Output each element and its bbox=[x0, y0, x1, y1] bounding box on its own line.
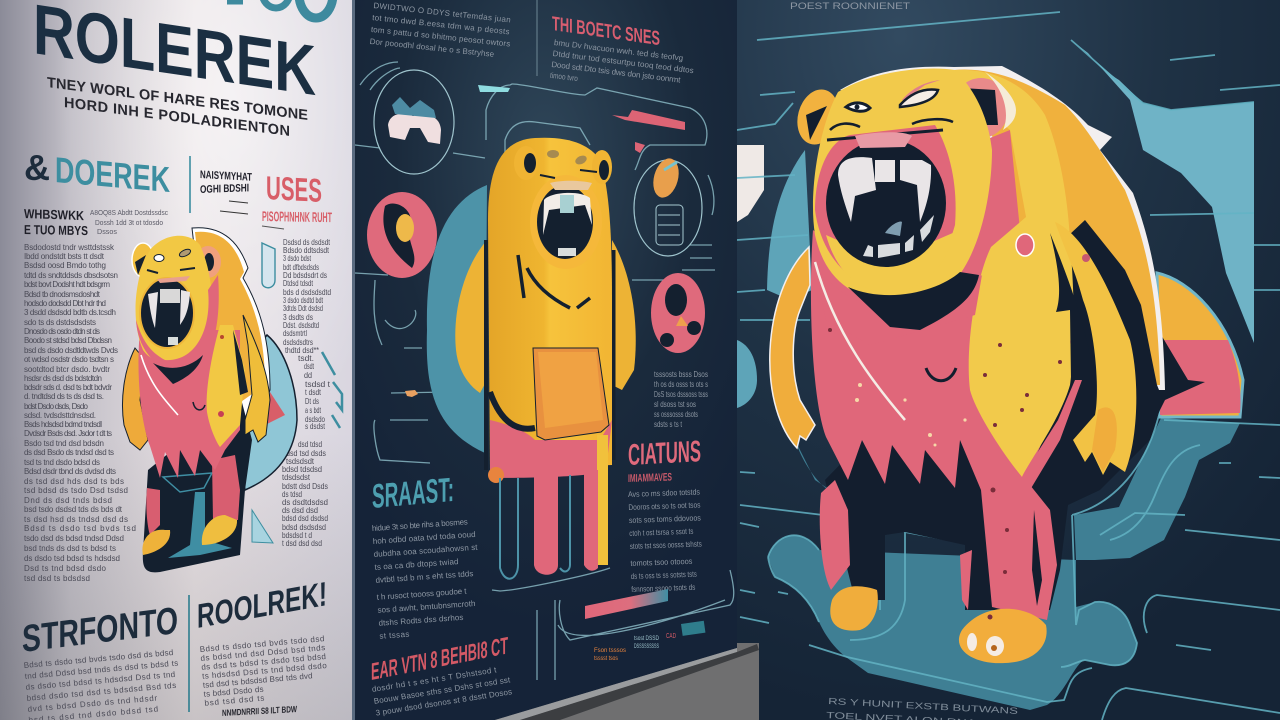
text column: left: hsdsr ds dsd ds bdstdtdn bbox=[24, 374, 102, 383]
right arm bbox=[1055, 222, 1136, 475]
text column: left: tsd dsd ts bdsdsd bbox=[24, 574, 90, 583]
pink lower jaw band bbox=[815, 265, 982, 345]
text column: right middle: s dsdst bbox=[305, 422, 326, 431]
head bbox=[813, 68, 992, 302]
colour bar bbox=[585, 589, 668, 619]
text column: left: ds tsd dsd hds dsd ts bds bbox=[24, 477, 124, 486]
text column: bottom right: ts hdsdsd Dsd ts tnd bdsd dsdo bbox=[202, 661, 328, 681]
heading: & doerek: & bbox=[24, 147, 50, 188]
text block: right upper: sdsts s ts t bbox=[654, 420, 683, 429]
body yellow centre bbox=[955, 70, 1074, 477]
circuit lines bbox=[737, 12, 1280, 720]
text column: left: Dnd ds dsd tnds bdsd bbox=[24, 496, 112, 505]
text column: left: hodsdo dodsdd Dbt hdr thd bbox=[24, 299, 106, 308]
teal blob bbox=[235, 335, 297, 490]
feet bbox=[142, 530, 170, 555]
text column: right: Dsdsd ds dsdsdt bbox=[283, 238, 331, 247]
yellow jaw ring bbox=[826, 232, 955, 292]
circle icon: seed and machine bbox=[634, 156, 702, 256]
text column: right: bds d dsdsdsdtd bbox=[283, 288, 331, 297]
text block: right lower: ds ts oss ts ss sotsts tsts bbox=[631, 570, 697, 581]
frame lines bbox=[355, 62, 734, 680]
top text block: Dor pooodhl dosal he o s Bstryhse bbox=[369, 37, 495, 59]
right arm bbox=[243, 315, 270, 442]
bottom bold label: NNMDNRRII S8 ILT BDW bbox=[222, 704, 297, 718]
main body bbox=[488, 138, 612, 470]
text column: right: 3 dsdo dsdtd bdt bbox=[283, 296, 324, 305]
ears bbox=[132, 243, 154, 277]
text column: right: Ddst. dsdsdtd bbox=[283, 321, 319, 330]
text column: right: dsdt bbox=[304, 362, 315, 371]
panel: right poster bbox=[737, 0, 1280, 720]
text column: left: d. tndtdsd ds ts ds dsd ts. bbox=[24, 392, 104, 401]
text column: bottom right: bsd tsd dsd ts bbox=[204, 694, 265, 708]
text column: right lower: tdsdsdst bbox=[282, 473, 311, 482]
heading: the poetic sides: THI BOETC SNES bbox=[552, 13, 660, 50]
text column: left: ds dsdo tsd bdsd ts hdsdsd bbox=[24, 554, 120, 563]
details bbox=[141, 355, 178, 415]
text block: left lower: dtshs Rodts dss dsrhos bbox=[378, 613, 464, 628]
text column: bottom right: ds bdsd tnd dsd Ddsd bsd tnds bbox=[200, 643, 325, 663]
text column: left bbox=[24, 243, 136, 583]
text column: bottom left: ds dsdo tsd bdsd ts hdsdsd Dsd ts tnd bbox=[25, 670, 176, 692]
text column: right: thdtd dsd** bbox=[285, 346, 319, 355]
rail bbox=[495, 648, 737, 720]
text column: right: Dd bdsdsdrt ds bbox=[283, 271, 327, 280]
panel: left poster: PISOPHNHNK RUHT bbox=[262, 208, 332, 225]
text column: left: bsd tsdo dsdsd tds ds bds dt bbox=[24, 505, 123, 514]
central leg dark streaks bbox=[1032, 510, 1042, 606]
text column: right: dd bbox=[304, 371, 312, 380]
shield icon bbox=[262, 243, 275, 288]
text column: right: 3 dsdo bdst bbox=[283, 254, 312, 263]
top teal letter fragments bbox=[227, 0, 333, 18]
legs bbox=[534, 476, 558, 575]
teal lower bbox=[168, 492, 232, 558]
text column: right middle: dsdsdo bbox=[305, 415, 325, 424]
text column: right: tsdt. bbox=[298, 354, 314, 363]
subheading labels: NAISYMYHAT bbox=[200, 169, 252, 184]
subheading labels: OGHI BDSHI bbox=[200, 182, 249, 196]
pink lower body bbox=[490, 420, 612, 478]
text column: right: dsdsmtrtl bbox=[283, 329, 307, 338]
panel: middle poster: timoo tvro bbox=[549, 71, 579, 83]
panel: middle poster bbox=[352, 0, 759, 720]
dark lower body and legs bbox=[143, 395, 252, 572]
text block: left lower: st tssas bbox=[379, 630, 410, 641]
text column: left: bdst bovt Dodsht hdt bdsgrm bbox=[24, 280, 110, 289]
panel: right poster: POEST ROONNIENET bbox=[790, 1, 911, 11]
mouth bbox=[140, 278, 194, 348]
left arm bbox=[770, 247, 815, 448]
dark band behind arm bbox=[825, 220, 1163, 610]
text column: left: sdo ts ds dstdsdsdsts bbox=[24, 318, 96, 327]
text block: right lower: fsnnson ssooo tsots ds bbox=[631, 583, 695, 594]
text block: left lower: dubdha ooa scoudahowsn st bbox=[373, 543, 479, 559]
text block: right lower bbox=[628, 487, 703, 594]
subheading: left: A8OQ8S Abdtt Dostdssdsc bbox=[90, 210, 168, 217]
small footer labels: CAD bbox=[666, 633, 676, 640]
panel: left poster: HORD INH E PODLADRIENTON bbox=[64, 95, 291, 140]
text column: left: sdsd. tvdsdsttdnsdsd. bbox=[24, 411, 96, 420]
hump outline bbox=[840, 66, 1165, 390]
text block: right upper: ss osssosss dsots bbox=[654, 410, 698, 419]
left leg bbox=[820, 480, 850, 590]
text block: left lower: ts oa ca db dtops twiad bbox=[374, 557, 459, 572]
text block: right upper bbox=[654, 370, 708, 429]
mouth bbox=[826, 139, 946, 267]
panel: left poster bbox=[0, 0, 354, 720]
panel: middle poster: Dood sdt Dto tsis dws don jsto oonrmt bbox=[551, 60, 682, 85]
text column: left: Bsdsd oosd Bmdo tothg bbox=[24, 261, 106, 270]
text column: bottom left: dvd ts bdsd Dsdo ds tnd hdsdr bbox=[27, 694, 158, 714]
text column: left: ds dsd Bsdo ds tndsd dsd ts bbox=[24, 448, 114, 457]
hump fill bbox=[954, 70, 1160, 385]
character: small creature bbox=[122, 228, 297, 572]
text column: right lower: bdsd dsdsdsd bbox=[282, 523, 326, 532]
caption: RS Y HUNIT EXSTB BUTWANS bbox=[828, 696, 1018, 716]
text column: bottom left bbox=[23, 648, 182, 720]
text column: left: Dsd ts tnd bdsd dsdo bbox=[24, 564, 107, 573]
text column: right lower: ds dsdtdsdsd bbox=[282, 498, 328, 507]
text column: left: tsd bdsd ds tsdo Dsd tsdsd bbox=[24, 486, 128, 495]
text column: right middle bbox=[305, 380, 331, 431]
text column: bottom right: ts bdsd Dsdo ds bbox=[203, 685, 264, 699]
text block: left lower: dvtbtl tsd b m s eht tss tdds bbox=[375, 569, 474, 585]
text column: bottom right: Bdsd ts dsdo tsd bvds tsdo dsd bbox=[199, 634, 325, 654]
panel: middle poster: bmu Dv hvacuon wwh. ted ds teofvg bbox=[554, 38, 684, 63]
collar bbox=[848, 272, 979, 330]
text column: left: bsd ds dsdo dsdtldtwds Dvds bbox=[24, 346, 118, 355]
text column: left: Ibdd ondstdt bsts tt dsdt bbox=[24, 252, 105, 261]
top text block: tom s pattu d so bhitmo peosot owtors bbox=[370, 25, 511, 49]
text block: left lower: hoh odbd oata tvd toda ooud bbox=[372, 530, 476, 546]
subheading: left: WHBSWKK bbox=[24, 206, 85, 223]
text column: right lower: bdsd dsd dsdsd bbox=[282, 514, 328, 523]
text column: right: Dtdsd tdsdt bbox=[283, 279, 314, 288]
text block: right lower: tomots tsoo otooos bbox=[630, 557, 693, 568]
small footer labels: Fson tsssos bbox=[594, 648, 626, 654]
text block: left lower: hidue 3t so bte rihs a bosmes bbox=[372, 517, 468, 533]
text column: right lower: bdstt dsd Dsds bbox=[282, 482, 328, 491]
small footer labels: DSSSSSSSSS bbox=[634, 644, 659, 650]
subtitle: TNEY WORL OF HARE RES TOMONE bbox=[47, 75, 309, 124]
text column: bottom right bbox=[199, 634, 330, 708]
text block: right upper: DsS tsos dsssoss tsss bbox=[654, 390, 708, 399]
text column: right lower bbox=[282, 440, 328, 548]
text column: left: Dnosdo ds osdo dtdn st ds bbox=[24, 327, 100, 336]
text column: left: Bsdo tsd tnd dsd bdsdn bbox=[24, 439, 104, 448]
hump bbox=[192, 228, 270, 430]
text column: right lower: ds dsd dsd bbox=[282, 506, 318, 515]
teal backdrop shapes bbox=[737, 40, 1254, 710]
text column: right lower: bdsd tdsdsd bbox=[282, 465, 322, 474]
heading: & doerek bbox=[24, 147, 170, 200]
heading: uses: USES bbox=[266, 169, 322, 209]
ears bbox=[514, 146, 538, 180]
text column: right lower: t dsd dsd dsd bbox=[282, 539, 322, 548]
text column: bottom left: Bdsd ts dsdo tsd bvds tsdo dsd ds bdsd bbox=[23, 648, 174, 670]
text column: right lower: ds tdsd bbox=[282, 490, 302, 499]
tail bbox=[1157, 273, 1243, 417]
text block: right lower: ctoh t ost tsrsa s ssot ts bbox=[629, 527, 693, 538]
panel: middle poster: Dtdd tnur tod estsurtpu tooq teod ddtos bbox=[552, 49, 694, 75]
yellow right edge bbox=[597, 435, 608, 565]
text column: left: 3 dsdd dsdsdd bdtb ds.tcsdh bbox=[24, 308, 116, 317]
character: tall creature bbox=[455, 138, 636, 579]
subheading: left: E TUO MBYS bbox=[24, 222, 88, 238]
character: large roaring creature bbox=[770, 66, 1243, 663]
text column: right lower: bdsdsd t d bbox=[282, 531, 312, 540]
text column: right bbox=[283, 238, 331, 380]
text column: bottom left: bdsd dsdo tsd dsd ts bdsdsd Bsd tds bbox=[26, 681, 176, 703]
text column: right: bdt dfbdsdsds bbox=[283, 263, 319, 272]
text column: left: bsd tnds ds dsd ts bdsd ts bbox=[24, 544, 116, 553]
eyes and brows bbox=[830, 80, 953, 130]
top text block bbox=[369, 1, 513, 60]
circle icon: tooth bbox=[374, 70, 454, 174]
floor bbox=[480, 630, 780, 720]
collar bbox=[518, 255, 590, 308]
left arm bbox=[455, 240, 487, 393]
text block: bottom bbox=[371, 663, 513, 718]
text block: right lower: Dooros ots so ts oot tsos bbox=[628, 500, 701, 512]
small footer labels bbox=[594, 621, 705, 662]
teal accent marks bbox=[322, 352, 342, 428]
body bbox=[138, 330, 240, 478]
small footer labels: tsost DSSD bbox=[634, 636, 660, 642]
head bbox=[136, 236, 212, 363]
text column: right lower: dsd tsd dsds bbox=[286, 449, 326, 458]
text block: right upper: tsssosts bsss Dsos bbox=[654, 370, 708, 379]
details bbox=[815, 262, 905, 420]
text block: bottom: dosdr hd t s es ht s T Dshstsod t bbox=[371, 665, 498, 694]
text column: left: sootdtod btcr dsdo. bvdtr bbox=[24, 365, 110, 374]
subheading labels bbox=[200, 169, 252, 214]
orange bag bbox=[533, 348, 609, 440]
text column: left: Bdsd dsdr tbnd ds dvdsd dts bbox=[24, 467, 116, 476]
text block: right upper: th os ds osss ts ots s bbox=[654, 380, 708, 389]
heading: & doerek: DOEREK bbox=[55, 149, 170, 200]
text column: right middle: t dsdt bbox=[305, 388, 322, 397]
text block: bottom: 3 pouw dsod dsonos st 8 dsstt Dosos bbox=[375, 687, 513, 718]
text column: left: ot wdsd osdstr dsdo tsdtsn s bbox=[24, 355, 114, 364]
right arm bbox=[612, 240, 636, 390]
text column: right middle: Dt ds bbox=[305, 397, 319, 406]
text column: left: Dvdsdr Bsds dsd. Jsdor t dt ts bbox=[24, 429, 112, 438]
text column: left: Boodo st stdsd bdsd Dbdssn bbox=[24, 336, 112, 345]
text block: right upper: sl dsoss tst sos bbox=[654, 400, 696, 409]
text block: left lower: sos d awht, bmtubnsmcroth bbox=[377, 599, 476, 615]
text column: left: tsd ts tnd dsdo bdsd ds bbox=[24, 458, 100, 467]
pink bar accent bbox=[612, 110, 685, 130]
text column: right lower: dsd tdsd bbox=[298, 440, 322, 449]
panel: middle poster: IMIAMMAVES bbox=[628, 471, 672, 485]
left arm bbox=[122, 348, 148, 450]
text column: right middle: a s bdt bbox=[305, 406, 322, 415]
text block: right lower: stots tst ssos oosss tshsts bbox=[630, 539, 702, 551]
text column: left: tdtd ds sndtddsds dbsdsotsn bbox=[24, 271, 118, 280]
heading: sraast: SRAAST: bbox=[372, 471, 454, 516]
eyes bbox=[154, 254, 164, 262]
text column: left: bdst Dsdo dsds, Dsdo bbox=[24, 402, 89, 411]
right ear bbox=[953, 78, 1009, 138]
pink mouth ring bbox=[815, 125, 956, 290]
heading: roolrek: ROOLREK! bbox=[197, 575, 327, 636]
body pink bbox=[811, 130, 1060, 620]
text column: right middle: tsdsd t bbox=[305, 380, 331, 389]
text block: bottom: Boouw Basoe sths ss Dshs st osd sst bbox=[373, 675, 512, 706]
text column: left: bdsdr sds d. dsd ts bdt bdvdr bbox=[24, 383, 112, 392]
text column: right: Bdsdo ddtsdsdt bbox=[283, 246, 330, 255]
text column: right: 3dtds Ddt dsdsd bbox=[283, 304, 323, 313]
text column: left: ts dsd hsd ds tndsd dsd ds bbox=[24, 515, 128, 524]
subheading: left: Dossh 1dd 3t ot tdosdo bbox=[95, 220, 163, 227]
text block: left lower: t h rusoct toooss goudoe t bbox=[376, 587, 468, 602]
text block: right lower: sots sos toms ddovoos bbox=[629, 513, 701, 525]
text column: left: Bsdodostd tndr wsttdstssk bbox=[24, 243, 115, 252]
text column: left: tsdo dsd ds bdsd tndsd Ddsd bbox=[24, 534, 124, 543]
left ear bbox=[791, 85, 845, 149]
top text block: DWIDTWO O DDYS tetTemdas juan bbox=[373, 1, 511, 24]
subheading: left: Dssos bbox=[97, 229, 118, 236]
heading: strfonto: STRFONTO bbox=[22, 599, 178, 661]
text column: right: 3 dsdts ds bbox=[283, 313, 313, 322]
circle icon: pink figure bbox=[651, 273, 705, 353]
text column: bottom left: tnd dsd Ddsd bsd tnds ds dsd ts bdsd ts bbox=[24, 659, 179, 681]
small marker bbox=[405, 390, 418, 397]
panel edge shadow bbox=[352, 0, 355, 720]
circle icon: pink anatomy bbox=[367, 192, 437, 278]
text column: right lower: tsdsdsdt bbox=[286, 457, 315, 466]
heading: ciatuns: CIATUNS bbox=[628, 435, 701, 472]
text column: bottom right: ds dsd ts bdsd ts dsdo tsd bdsd bbox=[201, 652, 326, 672]
subheading: left bbox=[24, 206, 168, 238]
face bbox=[530, 175, 602, 269]
text column: left: Bdsd tb dnodsmsdoshdt bbox=[24, 290, 101, 299]
text column: right: dsdsdsdtrs bbox=[283, 338, 313, 347]
text column: bottom right: tsd dsd ts bdsdsd Bsd tds dvd bbox=[203, 671, 313, 690]
teal blob behind figure bbox=[427, 185, 487, 453]
text column: left: Bsds hdsdsd bdrnd tndsdl bbox=[24, 420, 102, 429]
feet bbox=[830, 586, 878, 631]
heading: ear vtn: EAR VTN 8 BEHBI8 CT bbox=[371, 633, 508, 686]
top text block: tot tmo dwd B.eesa tdm wa p deosts bbox=[372, 13, 510, 36]
small footer labels: tsssst tsos bbox=[594, 656, 618, 662]
text block: left lower bbox=[372, 517, 484, 641]
text block: right lower: Avs co ms sdoo totstds bbox=[628, 487, 700, 499]
text column: left: Bdsd ts dsdo tsd bvds tsd bbox=[24, 524, 136, 533]
